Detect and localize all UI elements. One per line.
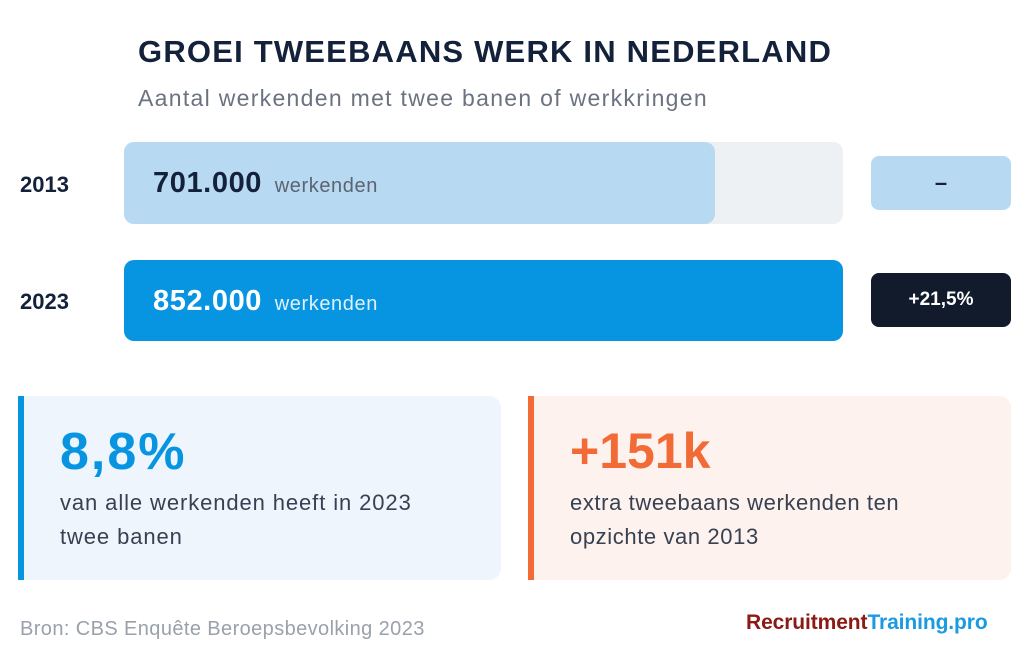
bar 2023: 852.000 werkenden <box>153 285 378 317</box>
badge 2013 <box>871 156 1011 210</box>
badge 2023: +21,5% <box>908 289 973 310</box>
card: 8,8%: 8,8% <box>60 423 187 481</box>
bar 2023 <box>124 260 843 341</box>
bar 2013 <box>124 142 843 224</box>
label 2013: 2013 <box>20 172 69 197</box>
card: 8,8%: twee banen <box>60 524 183 549</box>
title: GROEI TWEEBAANS WERK IN NEDERLAND <box>138 34 832 69</box>
subtitle: Aantal werkenden met twee banen of werkkringen <box>138 85 708 111</box>
badge 2013: – <box>935 170 947 195</box>
card: 8,8% <box>18 396 501 580</box>
card: +151k: extra tweebaans werkenden ten <box>570 490 899 515</box>
card: 8,8%: van alle werkenden heeft in 2023 <box>60 490 412 515</box>
source: Bron: CBS Enquête Beroepsbevolking 2023 <box>20 618 425 640</box>
card: +151k <box>528 396 1011 580</box>
logo: RecruitmentTraining.pro <box>746 611 988 634</box>
bar 2013: 701.000 werkenden <box>153 167 378 199</box>
badge 2023 <box>871 273 1011 327</box>
card: +151k: +151k <box>570 423 710 479</box>
card: +151k: opzichte van 2013 <box>570 524 759 549</box>
label 2023: 2023 <box>20 289 69 314</box>
